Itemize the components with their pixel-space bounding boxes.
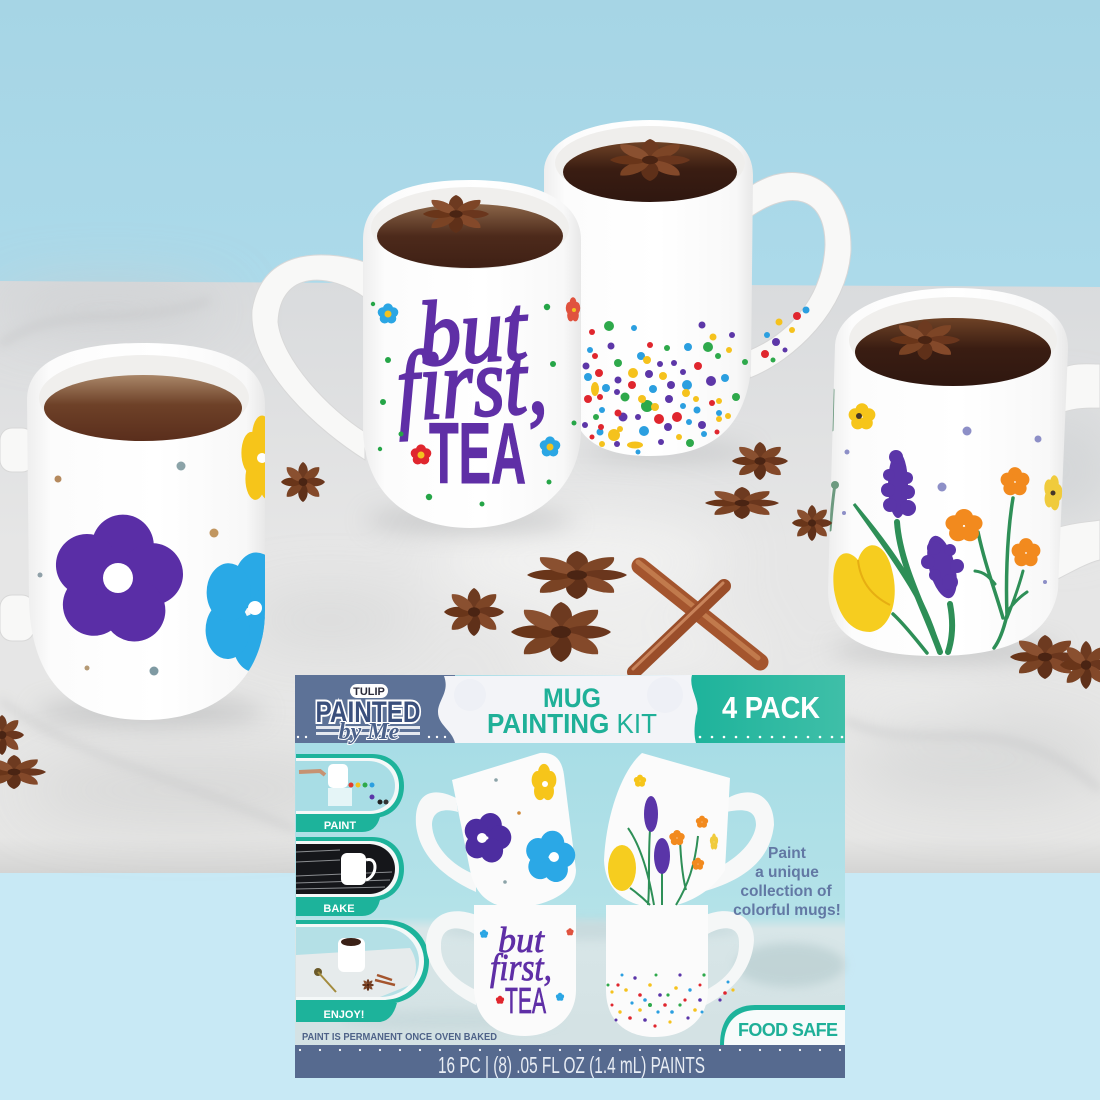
- yellow flower: [241, 416, 265, 500]
- purple flower: [56, 514, 183, 642]
- box mug: top right tilted: [604, 753, 774, 908]
- mug: dotted (back): [544, 120, 851, 456]
- logo: Tulip Painted by Me: TULIP: [353, 686, 385, 698]
- lettering: but first, TEA: TEA: [429, 406, 526, 502]
- box mug: top left tilted: [416, 753, 579, 908]
- box side tagline: Paint: [768, 845, 806, 862]
- tea surface: [377, 204, 563, 268]
- step panel: bake: BAKE: [323, 903, 355, 915]
- tea surface: [563, 142, 737, 202]
- orange flowers: [945, 467, 1040, 566]
- background: sky blue wall: [0, 0, 1100, 290]
- star anise on tea: mug 2: [423, 195, 489, 233]
- lettering: but first, TEA: [394, 276, 549, 502]
- food safe badge: FOOD SAFE: [738, 1020, 838, 1040]
- box title: PAINTING KIT: [487, 708, 657, 739]
- background: pale blue lower band: [0, 870, 1100, 1100]
- tea surface: [44, 375, 242, 441]
- box side tagline: collection of: [740, 883, 832, 900]
- tea surface: [855, 318, 1051, 386]
- box bottom band: 16 PC | (8) .05 FL OZ (1.4 mL) PAINTS: [438, 1052, 705, 1078]
- mug shadows: [35, 444, 1060, 726]
- lettering: but first, TEA: but: [415, 276, 532, 385]
- logo: Tulip Painted by Me: [316, 684, 420, 745]
- logo: Tulip Painted by Me: PAINTED: [316, 696, 420, 729]
- green dots: [371, 302, 576, 506]
- box mug: bottom right: [606, 905, 754, 1037]
- handle dots: [761, 306, 810, 362]
- lavender: [881, 450, 964, 601]
- 4 pack label: 4 PACK: [722, 690, 821, 725]
- star anise scattered on marble: [0, 442, 1100, 789]
- lettering on box mug: first,: [490, 947, 552, 989]
- yellow tulip: [833, 545, 895, 632]
- step panel: enjoy: ENJOY!: [324, 1009, 364, 1021]
- polka dots: [582, 321, 748, 454]
- box mug: bottom left: [426, 905, 576, 1036]
- grey-blue dots: [842, 426, 1047, 584]
- paint permanence note: PAINT IS PERMANENT ONCE OVEN BAKED: [302, 1031, 497, 1043]
- box title: [487, 683, 657, 739]
- mug: wildflowers (right): [828, 288, 1100, 656]
- box top dots: [297, 736, 843, 738]
- lettering on box mug: but: [498, 920, 545, 960]
- small dots: [38, 462, 218, 676]
- mug: big flowers (left): [0, 343, 265, 720]
- stems and leaves: [830, 390, 1027, 653]
- small yellow flowers: [849, 403, 1064, 513]
- painted wildflowers: [608, 775, 718, 905]
- box top: white cloud: [438, 675, 698, 743]
- small painted flowers: [378, 297, 580, 464]
- step panel: bake: [296, 837, 404, 916]
- lettering on box mug: [490, 920, 552, 1021]
- box top band: slate: [295, 675, 455, 743]
- box side tagline: a unique: [755, 864, 819, 881]
- box marble patches: [340, 920, 845, 1030]
- blue flower: [206, 552, 265, 671]
- step panel: paint: [296, 754, 404, 832]
- box side tagline: colorful mugs!: [733, 902, 841, 919]
- painted flowers: [458, 764, 579, 885]
- product box: [295, 675, 845, 1078]
- cinnamon sticks: [633, 562, 760, 672]
- box top band: teal: [690, 675, 845, 743]
- star anise on tea: mug 4: [890, 320, 960, 360]
- dots on box mug: [606, 973, 735, 1028]
- step panel: enjoy: [296, 920, 429, 1022]
- marble tabletop: [0, 281, 1100, 873]
- lettering: but first, TEA: first,: [394, 326, 549, 442]
- logo: Tulip Painted by Me: by Me: [339, 719, 400, 745]
- box side tagline: [733, 845, 841, 919]
- step panel: paint: PAINT: [324, 820, 356, 832]
- mug: but first tea: [252, 180, 581, 528]
- lettering on box mug: TEA: [505, 980, 546, 1021]
- box bottom band: [295, 1045, 845, 1078]
- food safe badge: [720, 1005, 845, 1045]
- box title: MUG: [543, 683, 601, 713]
- star anise on tea: mug 3: [610, 139, 690, 181]
